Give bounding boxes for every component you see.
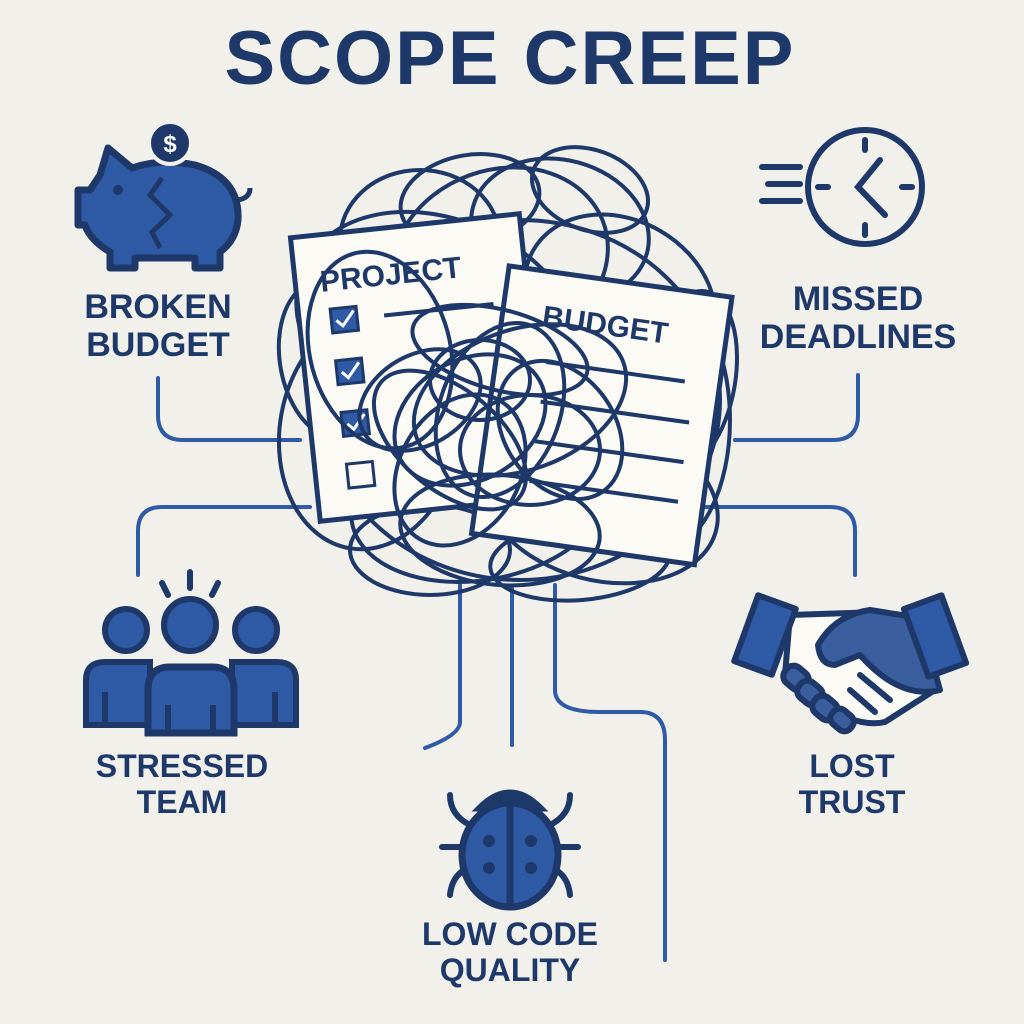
text: stressed team: TEAM (137, 784, 227, 820)
text: lost trust: LOST (809, 748, 895, 784)
scribble front (287, 235, 648, 594)
text: broken budget: BUDGET (86, 326, 230, 364)
text: broken budget: BROKEN (84, 288, 232, 326)
document: budget (472, 266, 732, 565)
document: project (290, 214, 549, 521)
icon: bug (442, 793, 578, 907)
icon: piggy bank: $ (163, 131, 177, 158)
scribble back (258, 132, 750, 608)
text: low code quality: QUALITY (440, 952, 580, 988)
text: missed deadlines: MISSED (793, 280, 923, 318)
document: budget: BUDGET (540, 300, 670, 351)
icon: stressed team (86, 572, 296, 733)
icon: clock (762, 130, 922, 244)
document: project: PROJECT (319, 251, 463, 299)
central tangle with documents (258, 132, 750, 608)
title: SCOPE CREEP (224, 16, 796, 101)
text: stressed team: STRESSED (96, 748, 268, 784)
connector lines (138, 375, 858, 960)
text: missed deadlines: DEADLINES (760, 318, 956, 356)
text: lost trust: TRUST (799, 784, 906, 820)
icon: handshake (734, 595, 966, 735)
icon: piggy bank (78, 122, 250, 268)
text: low code quality: LOW CODE (422, 916, 598, 952)
